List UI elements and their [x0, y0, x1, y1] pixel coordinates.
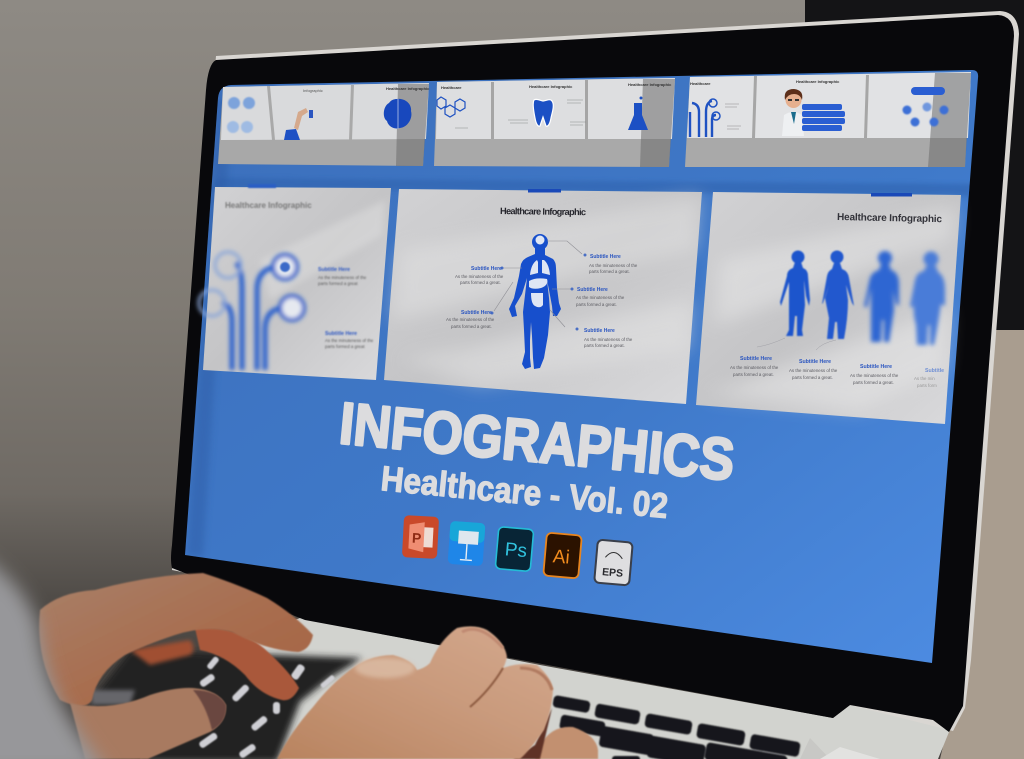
- slide: healthcare body: parts formed a great.: [576, 302, 617, 307]
- slide: healthcare body: Subtitle Here: [584, 328, 615, 334]
- captions: Subtitle: [925, 368, 944, 374]
- slide: tree diagram (blurred): Healthcare Infographic: [225, 201, 312, 210]
- thumb: [70, 688, 226, 759]
- thumbnail group 3: [685, 72, 971, 167]
- slide: body types: parts form: [917, 383, 937, 388]
- icon: PowerPoint: [402, 515, 439, 559]
- body figure: [509, 234, 561, 369]
- text block: Subtitle Here: [318, 267, 350, 273]
- slide: body types: parts formed a great.: [733, 372, 774, 377]
- laptop lid: [171, 11, 1019, 732]
- slide: healthcare body: As the minuteness of the: [589, 263, 638, 268]
- slide: healthcare body: parts formed a great.: [451, 324, 492, 329]
- text block: As the minuteness of the: [318, 275, 367, 280]
- body organs: [529, 236, 550, 307]
- thumbnail group 2: Healthcare: [441, 85, 462, 90]
- title: INFOGRAPHICS: [337, 390, 737, 493]
- heading: Healthcare Infographic: [500, 206, 586, 217]
- thumbnail group 2: Healthcare Infographic: [628, 82, 672, 87]
- icon: flask: [628, 103, 648, 130]
- slide: healthcare body: [384, 189, 702, 404]
- slide: healthcare body: As the minuteness of the: [446, 317, 495, 322]
- captions: Subtitle Here: [740, 356, 772, 362]
- subtitle: Healthcare - Vol. 02: [379, 459, 670, 526]
- blue list bars: [802, 104, 845, 131]
- far finger: [535, 727, 598, 759]
- right hand: [277, 626, 598, 759]
- captions: Subtitle Here: [799, 359, 831, 365]
- body silhouettes: [780, 250, 945, 345]
- top row thumbnails: [218, 72, 971, 167]
- slide: body types: As the minuteness of the: [730, 365, 779, 370]
- screen: [185, 70, 978, 663]
- text block: [318, 267, 374, 349]
- back of hand and index finger: [39, 573, 313, 706]
- callouts: [494, 241, 582, 327]
- captions: Subtitle Here: [860, 364, 892, 370]
- laptop keyboard deck: [90, 618, 949, 759]
- slide: body types: parts formed a great.: [853, 380, 894, 385]
- heading: Healthcare Infographic: [837, 212, 943, 225]
- icon: Illustrator: [543, 533, 582, 578]
- text block: parts formed a great: [325, 344, 365, 349]
- text block: parts formed a great: [318, 281, 358, 286]
- thumbnail group 2: Healthcare Infographic: [529, 84, 573, 89]
- icon: PowerPoint: P: [412, 530, 422, 546]
- thumbnail group 1: Infographic: [303, 88, 323, 93]
- slide: healthcare body: Subtitle Here: [461, 310, 492, 316]
- sleeve: [0, 555, 110, 759]
- slide: tree diagram (blurred): [199, 184, 391, 380]
- finger crease: [470, 668, 503, 707]
- icon: Keynote: [448, 521, 485, 566]
- icon: EPS: EPS: [602, 566, 624, 580]
- slide: healthcare body: parts formed a great.: [589, 269, 630, 274]
- thumbnail group 3: Healthcare Infographic: [796, 79, 840, 84]
- doctor: [782, 89, 804, 136]
- slide: body types: As the minuteness of the: [789, 368, 838, 373]
- text block: Subtitle Here: [325, 331, 357, 337]
- slide: healthcare body: Subtitle Here: [590, 254, 621, 260]
- slide: healthcare body: As the minuteness of the: [576, 295, 625, 300]
- captions: [740, 356, 944, 374]
- icon: tree: [690, 99, 720, 137]
- thumb nail: [193, 690, 226, 730]
- software icons: [402, 515, 633, 585]
- icon: Photoshop: Ps: [504, 539, 528, 562]
- icon: Photoshop: [495, 527, 534, 571]
- slide: healthcare body: As the minuteness of the: [455, 274, 504, 279]
- slide: body types: As the minuteness of the: [850, 373, 899, 378]
- icon: Illustrator: Ai: [552, 546, 571, 569]
- icon: blurred tree branches: [199, 252, 304, 370]
- speaker grille: [820, 747, 880, 759]
- slide: healthcare body: Subtitle Here: [471, 266, 502, 272]
- slide: healthcare body: As the minuteness of the: [584, 337, 633, 342]
- thumbnail group 2: [434, 78, 675, 167]
- slide: healthcare body: Subtitle Here: [577, 287, 608, 293]
- left hand: [39, 573, 313, 759]
- slide: body types: [696, 192, 961, 424]
- ring finger: [130, 640, 194, 665]
- slide: healthcare body: parts formed a great.: [584, 343, 625, 348]
- slide: body types: parts formed a great.: [792, 375, 833, 380]
- thumbnail group 1: [218, 83, 430, 166]
- thumbnail group 3: Healthcare: [690, 81, 711, 86]
- keyboard right keys: [552, 695, 801, 759]
- thumbnail group 1: Healthcare Infographic: [386, 86, 430, 91]
- icon: brain: [384, 99, 411, 129]
- icon: EPS: [594, 540, 633, 585]
- middle finger: [195, 628, 299, 700]
- text block: As the minuteness of the: [325, 338, 374, 343]
- icon: tooth: [533, 99, 553, 126]
- slide: body types: As the min: [914, 376, 935, 381]
- slide: healthcare body: parts formed a great.: [460, 280, 501, 285]
- keyboard left: [90, 650, 362, 759]
